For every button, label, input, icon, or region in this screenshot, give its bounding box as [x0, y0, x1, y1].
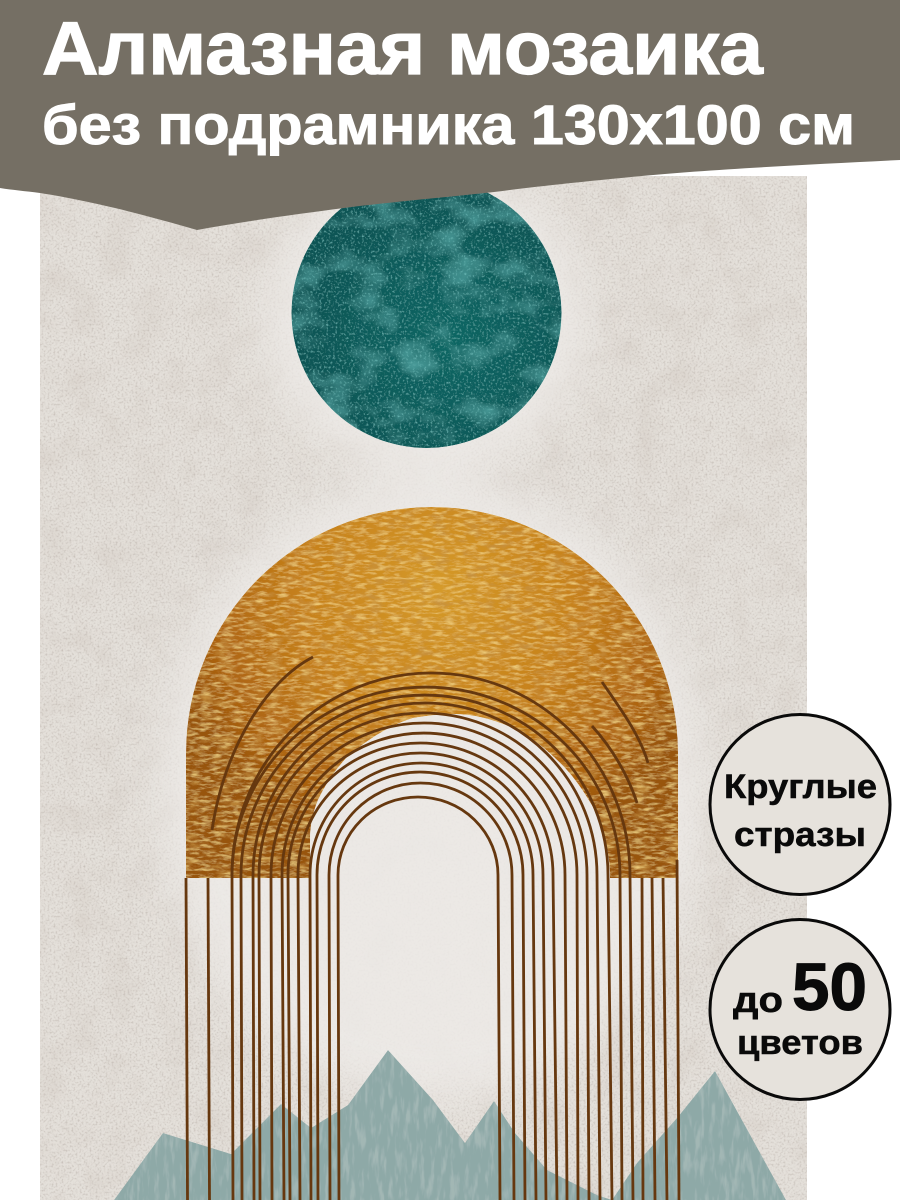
- light halo behind shapes: [162, 165, 702, 1100]
- title: Алмазная мозаика: [42, 6, 764, 90]
- banner shape: [0, 0, 900, 230]
- badge: up to 50 colours: до: [733, 979, 783, 1020]
- badge: round rhinestones: стразы: [734, 816, 866, 854]
- arch lines: [186, 657, 679, 1200]
- subtitle: без подрамника 130х100 см: [42, 93, 855, 156]
- badge: round rhinestones: [710, 714, 890, 894]
- mountains: [114, 1050, 786, 1200]
- badge: up to 50 colours: цветов: [737, 1024, 863, 1062]
- badge: round rhinestones: Круглые: [724, 768, 877, 806]
- panel: artwork: [40, 165, 807, 1200]
- banner: [0, 0, 900, 230]
- golden arch: [186, 507, 678, 878]
- teal circle: [292, 178, 562, 448]
- badge: up to 50 colours: 50: [792, 950, 867, 1025]
- artwork wall texture: [40, 176, 807, 1200]
- badge: up to 50 colours: [710, 920, 890, 1100]
